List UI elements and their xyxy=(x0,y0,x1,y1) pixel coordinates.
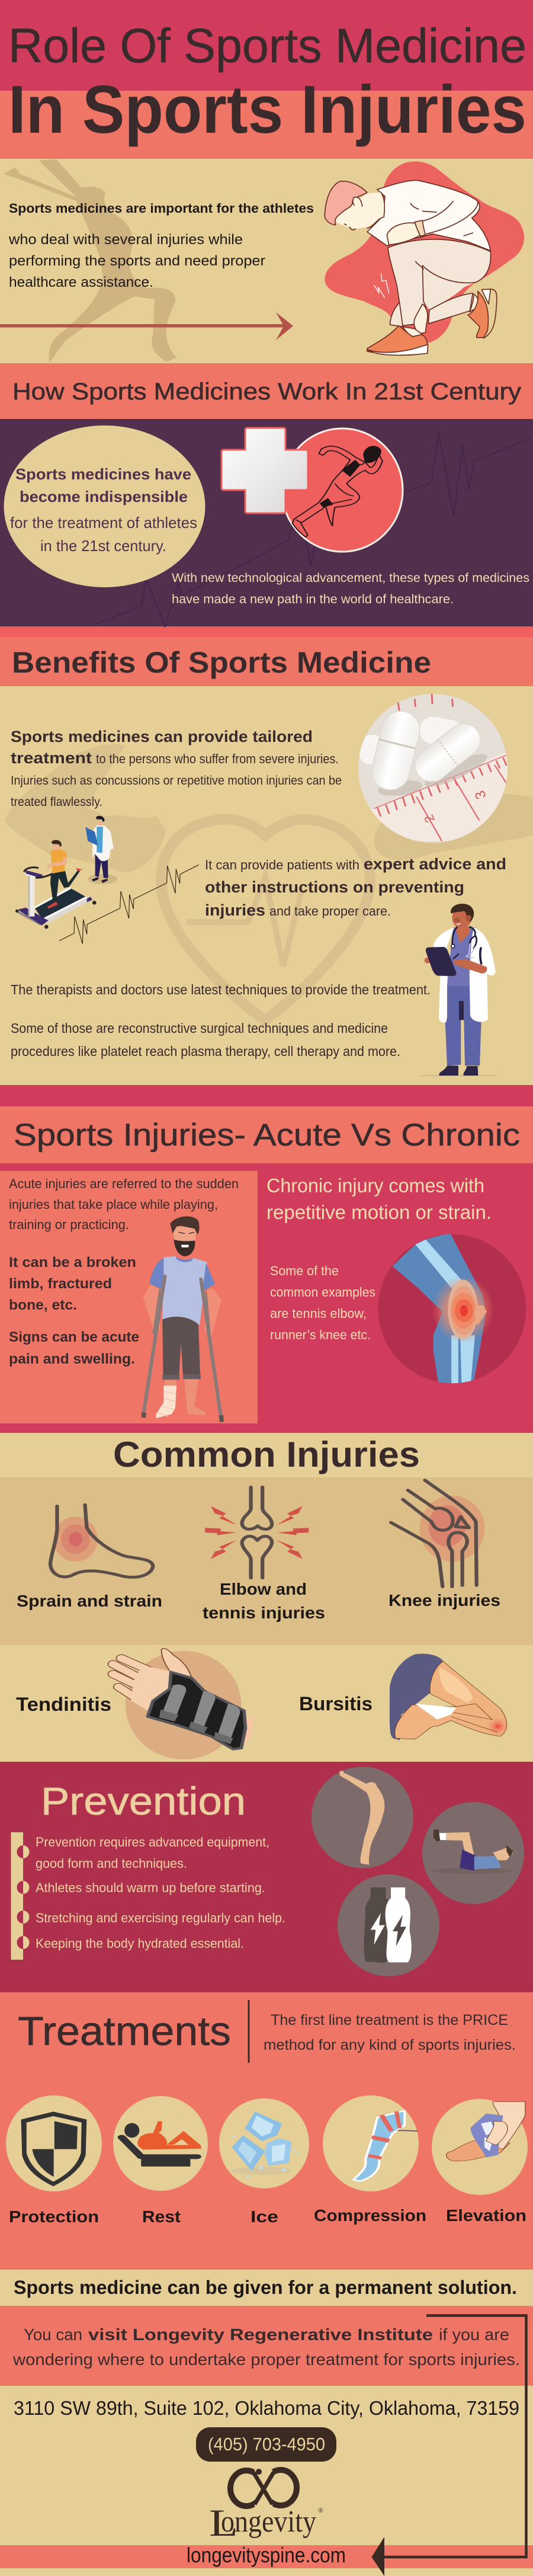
illustration: doctor with tablet xyxy=(420,904,496,1076)
treatment labels: Rest xyxy=(142,2207,181,2226)
panel: acute injuries xyxy=(0,1171,258,1423)
benefit text: techniques: Some of those are reconstructive surgical techniques and medicine xyxy=(11,1020,388,1036)
chronic text: runner’s knee etc. xyxy=(270,1327,371,1342)
acute text: bone, etc. xyxy=(9,1297,77,1313)
intro text: Sports medicines are important for the athletes xyxy=(9,201,314,216)
label: sprain and strain: Sprain and strain xyxy=(17,1592,162,1610)
back pills xyxy=(359,717,459,764)
benefit text: tailored treatment: Sports medicines can provide tailored xyxy=(11,728,313,745)
benefit text: expert advice xyxy=(205,855,506,919)
chronic text: Some of the xyxy=(270,1263,339,1278)
treatment labels xyxy=(9,2206,526,2226)
title: Role Of Sports Medicine xyxy=(8,19,526,73)
heading: how sports medicines work: How Sports Medicines Work In 21st Century xyxy=(12,379,521,405)
front pills xyxy=(371,711,480,791)
intro text: who deal with several injuries while xyxy=(8,232,243,248)
heading: acute vs chronic: Sports Injuries- Acute Vs Chronic xyxy=(14,1118,520,1153)
callout circle: Sports medicines have xyxy=(15,465,191,483)
ecg line xyxy=(59,865,199,944)
technology text: With new technological advancement, these types of medicines xyxy=(172,571,529,585)
phone pill xyxy=(196,2427,336,2462)
logo: longevity: L xyxy=(209,2502,238,2545)
runner circle xyxy=(282,428,403,552)
heading: treatments: Treatments xyxy=(18,2008,231,2054)
icon: stretching figure xyxy=(312,1767,413,1868)
intro text: healthcare assistance. xyxy=(9,274,153,290)
icon: elevation xyxy=(432,2099,528,2195)
photo: pills and measuring tape: 3 xyxy=(472,788,490,801)
label: tendinitis: Tendinitis xyxy=(16,1694,111,1715)
prevention list: good form and techniques. xyxy=(36,1856,187,1871)
prevention list: Keeping the body hydrated essential. xyxy=(36,1936,244,1951)
acute text: Signs can be acute xyxy=(9,1329,139,1345)
icon: elbow joint xyxy=(205,1487,309,1578)
website: longevityspine.com xyxy=(187,2543,346,2567)
treatment labels: Compression xyxy=(314,2206,426,2225)
benefit text: tailored treatment: treated flawlessly. xyxy=(11,795,102,809)
phone pill: (405) 703-4950 xyxy=(208,2434,325,2455)
technology text xyxy=(172,571,529,606)
illustration: injured man xyxy=(325,161,524,355)
callout circle xyxy=(4,425,205,587)
technology text: have made a new path in the world of healthcare. xyxy=(172,593,454,606)
call to action text: wondering where to undertake proper treatment for sports injuries. xyxy=(12,2350,520,2369)
prevention list: Athletes should warm up before starting. xyxy=(36,1880,265,1895)
benefit text: expert advice: and take proper care. xyxy=(269,904,391,919)
chronic text: common examples xyxy=(270,1285,375,1300)
panel: benefits xyxy=(5,690,533,1076)
acute text: Acute injuries are referred to the sudden xyxy=(9,1176,239,1191)
heading: benefits: Benefits Of Sports Medicine xyxy=(12,646,431,679)
illustration: inflamed knee xyxy=(378,1233,526,1385)
banner: permanent solution: Sports medicine can be given for a permanent solution. xyxy=(14,2277,517,2298)
treatment labels: Ice xyxy=(251,2207,278,2226)
icon: ice xyxy=(219,2098,309,2188)
prevention list: Stretching and exercising regularly can help. xyxy=(36,1911,285,1925)
label: elbow and tennis injuries xyxy=(203,1580,325,1622)
benefit text: expert advice: injuries xyxy=(205,901,265,919)
icon: sprained foot xyxy=(50,1505,153,1577)
acute text: limb, fractured xyxy=(9,1276,112,1292)
panel: 21st century xyxy=(4,425,530,626)
treatment labels: Protection xyxy=(9,2207,99,2226)
chronic text xyxy=(266,1175,492,1342)
illustration: treadmill with doctor xyxy=(15,816,117,929)
price method text: The first line treatment is the PRICE xyxy=(271,2012,508,2028)
panel: chronic injuries xyxy=(266,1175,526,1385)
panel: intro xyxy=(0,159,524,363)
illustration: wrist brace xyxy=(113,1649,253,1759)
call to action text: if you are xyxy=(439,2325,509,2344)
benefit text: tailored treatment xyxy=(11,728,342,809)
label: knee injuries: Knee injuries xyxy=(388,1591,500,1609)
icon: rest xyxy=(113,2096,208,2191)
panel: common injuries xyxy=(16,1480,509,1759)
call to action text: You can xyxy=(24,2325,82,2344)
callout circle: in the 21st century. xyxy=(40,537,166,555)
prevention list xyxy=(36,1835,285,1951)
label: bursitis: Bursitis xyxy=(299,1693,373,1714)
list rail with bullets xyxy=(11,1832,30,1960)
acute text: pain and swelling. xyxy=(9,1351,135,1367)
title xyxy=(8,19,526,148)
icon: sit-ups xyxy=(422,1802,524,1904)
treatment labels: Elevation xyxy=(446,2206,526,2225)
photo: pills and measuring tape xyxy=(358,694,508,843)
benefit text: expert advice: other instructions on preventing xyxy=(205,878,464,896)
label: elbow and tennis injuries: tennis injuries xyxy=(203,1604,325,1622)
icon: water bottles xyxy=(338,1874,439,1976)
benefit text: tailored treatment: Injuries such as concussions or repetitive motion injuries can be xyxy=(11,774,342,788)
arrow: frame to website xyxy=(372,2316,526,2576)
benefit text: tailored treatment: treatment xyxy=(11,749,92,767)
logo: longevity: ongevity xyxy=(221,2505,316,2539)
panel: prevention xyxy=(11,1767,524,1976)
illustration: elbow bursitis xyxy=(390,1654,509,1740)
benefit text: techniques xyxy=(11,982,431,1059)
icon: compression xyxy=(323,2095,419,2191)
photo: pills and measuring tape: 2 xyxy=(421,812,438,825)
benefit text: tailored treatment: to the persons who suffer from severe injuries. xyxy=(96,751,339,766)
acute text: injuries that take place while playing, xyxy=(9,1197,218,1212)
decorative heart and muscle watermark xyxy=(5,744,533,1020)
callout circle: become indispensible xyxy=(20,488,188,505)
heading: prevention: Prevention xyxy=(41,1779,246,1823)
acute text: training or practicing. xyxy=(9,1217,129,1232)
intro text: performing the sports and need proper xyxy=(9,253,265,269)
prevention list: Prevention requires advanced equipment, xyxy=(36,1835,269,1849)
icon: knee joint xyxy=(391,1480,485,1587)
chronic text: Chronic injury comes with xyxy=(266,1175,484,1196)
shadows under pills xyxy=(378,754,487,796)
icon: protection shield xyxy=(6,2095,102,2191)
label: elbow and tennis injuries: Elbow and xyxy=(220,1580,307,1598)
background ecg line xyxy=(97,432,530,626)
benefit text: techniques: procedures like platelet reach plasma therapy, cell therapy and more. xyxy=(11,1044,400,1059)
address: 3110 SW 89th, Suite 102, Oklahoma City, Oklahoma, 73159 xyxy=(14,2397,519,2419)
arrow xyxy=(0,312,293,340)
price method text: method for any kind of sports injuries. xyxy=(264,2037,516,2053)
benefit text: expert advice: It can provide patients with xyxy=(205,857,359,872)
icon: sprinter xyxy=(293,446,383,537)
price method text xyxy=(264,2012,516,2053)
illustration: man on crutches xyxy=(142,1217,224,1422)
acute text: It can be a broken xyxy=(9,1255,136,1271)
benefit text: expert advice: expert advice and xyxy=(364,855,506,873)
acute text xyxy=(9,1176,239,1367)
logo: longevity xyxy=(209,2469,323,2545)
chronic text: repetitive motion or strain. xyxy=(266,1201,492,1223)
divider xyxy=(248,2000,250,2063)
call to action text: visit Longevity Regenerative Institute xyxy=(88,2325,433,2344)
intro text xyxy=(8,201,314,290)
logo: longevity: ® xyxy=(318,2506,323,2514)
callout circle: for the treatment of athletes xyxy=(10,514,197,532)
icon: medical cross xyxy=(221,428,308,513)
panel: treatments xyxy=(6,2000,528,2226)
silhouette: leaping athlete xyxy=(4,159,176,363)
chronic text: are tennis elbow, xyxy=(270,1306,367,1321)
call to action text xyxy=(12,2325,520,2369)
benefit text: techniques: The therapists and doctors use latest techniques to provide the treatment. xyxy=(11,982,431,997)
heading: common injuries: Common Injuries xyxy=(113,1435,420,1474)
